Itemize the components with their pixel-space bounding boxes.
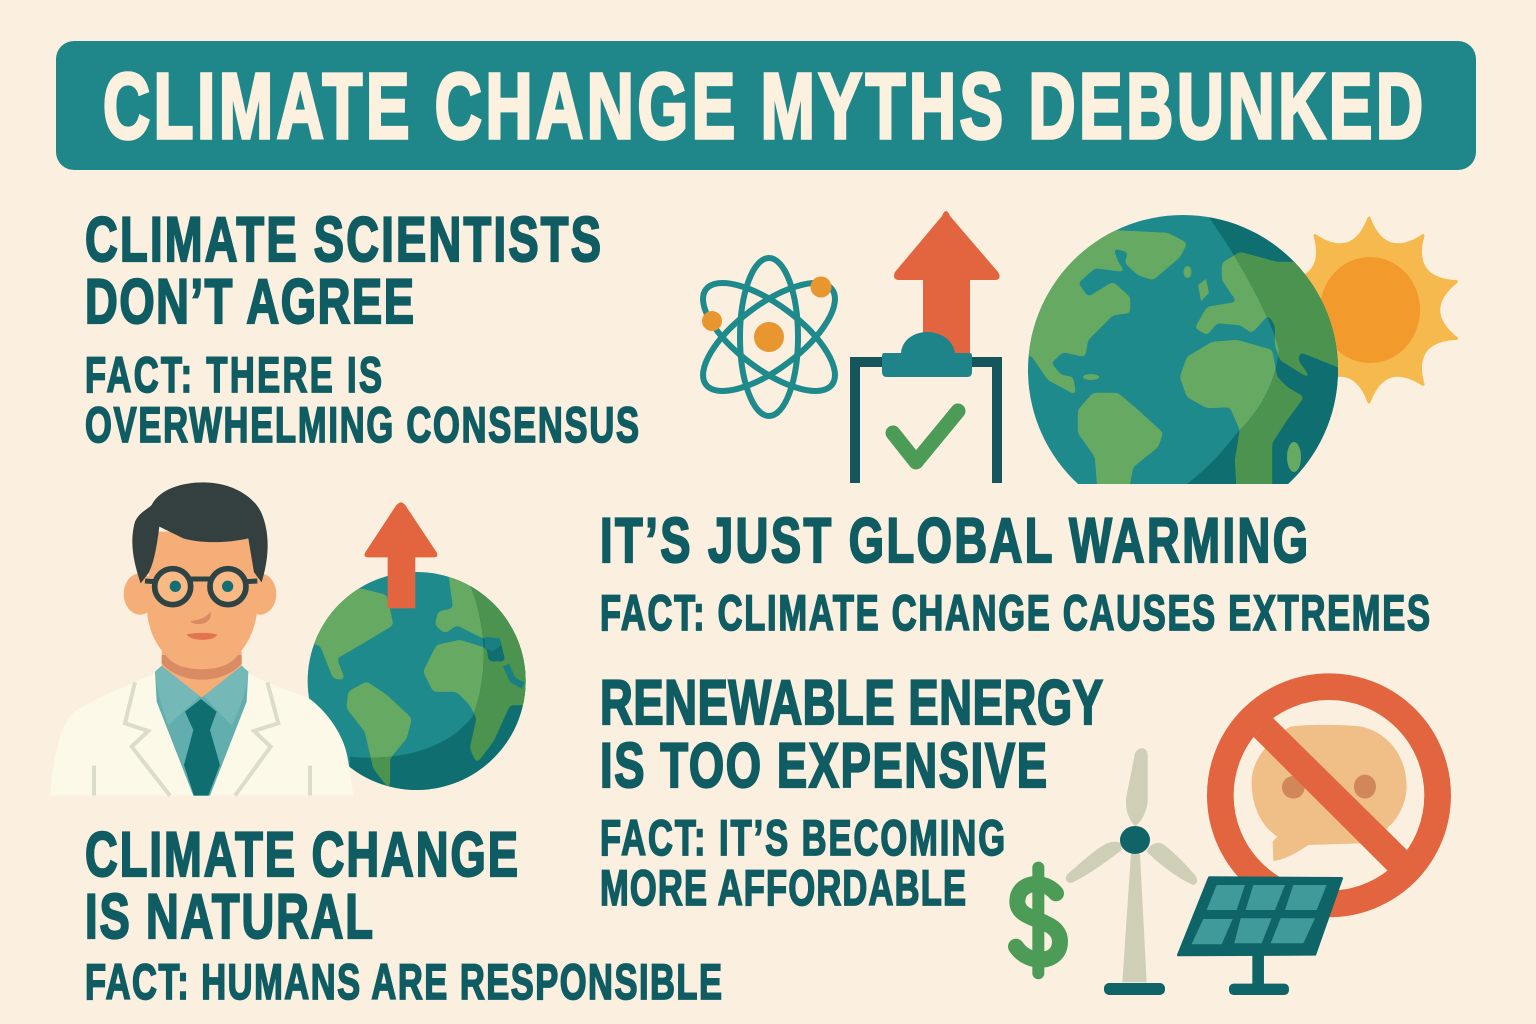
heading: climate scientists don't agree: CLIMATE SCIENTISTS	[85, 204, 601, 275]
icon: sun	[1282, 218, 1456, 402]
shirt and collar	[155, 666, 248, 796]
coat lapels	[94, 682, 310, 796]
title banner	[56, 41, 1476, 170]
heading: climate change is natural: IS NATURAL	[85, 881, 373, 952]
icon: red up arrow	[894, 211, 1000, 356]
panel: renewable energy myth	[600, 667, 1438, 995]
icon: prohibited speech bubble	[1220, 687, 1438, 904]
ears	[124, 573, 276, 615]
fact: climate change causes extremes: FACT: CLIMATE CHANGE CAUSES EXTREMES	[600, 586, 1430, 642]
icon: wind turbine	[1066, 748, 1197, 995]
icon: atom	[687, 258, 851, 416]
fact: becoming more affordable: MORE AFFORDABLE	[600, 861, 966, 917]
fact: becoming more affordable	[600, 811, 1005, 917]
heading: climate scientists don't agree	[85, 204, 601, 337]
tie	[184, 699, 220, 796]
heading: renewable energy is too expensive: RENEWABLE ENERGY	[600, 667, 1103, 738]
heading: it's just global warming: IT’S JUST GLOBAL WARMING	[600, 505, 1308, 576]
fact: becoming more affordable: FACT: IT’S BECOMING	[600, 811, 1005, 867]
icon: small earth globe with arrow	[300, 502, 533, 795]
heading: renewable energy is too expensive: IS TOO EXPENSIVE	[600, 730, 1047, 801]
heading: climate change is natural	[85, 819, 518, 952]
fact: overwhelming consensus	[85, 348, 639, 454]
illustration: scientist in lab coat	[50, 482, 353, 796]
icon: clipboard with check	[855, 332, 997, 483]
fact: overwhelming consensus: OVERWHELMING CONSENSUS	[85, 398, 639, 454]
icon: large earth globe	[1028, 215, 1338, 484]
lab coat	[50, 673, 353, 796]
title: CLIMATE CHANGE MYTHS DEBUNKED	[103, 55, 1423, 159]
hair	[132, 482, 268, 583]
fact: overwhelming consensus: FACT: THERE IS	[85, 348, 382, 404]
icon: dollar sign	[1016, 868, 1060, 973]
face	[147, 532, 257, 669]
panel: natural myth	[50, 482, 722, 1011]
nose and mouth	[187, 611, 217, 640]
panel: global warming myth	[600, 505, 1430, 642]
fact: humans are responsible: FACT: HUMANS ARE RESPONSIBLE	[85, 955, 722, 1011]
neck	[162, 652, 242, 698]
heading: climate change is natural: CLIMATE CHANGE	[85, 819, 518, 890]
panel: scientists myth text	[85, 204, 639, 454]
icon: solar panel	[1178, 878, 1342, 995]
heading: renewable energy is too expensive	[600, 667, 1103, 801]
heading: climate scientists don't agree: DON’T AGREE	[85, 266, 414, 337]
glasses	[145, 569, 257, 605]
